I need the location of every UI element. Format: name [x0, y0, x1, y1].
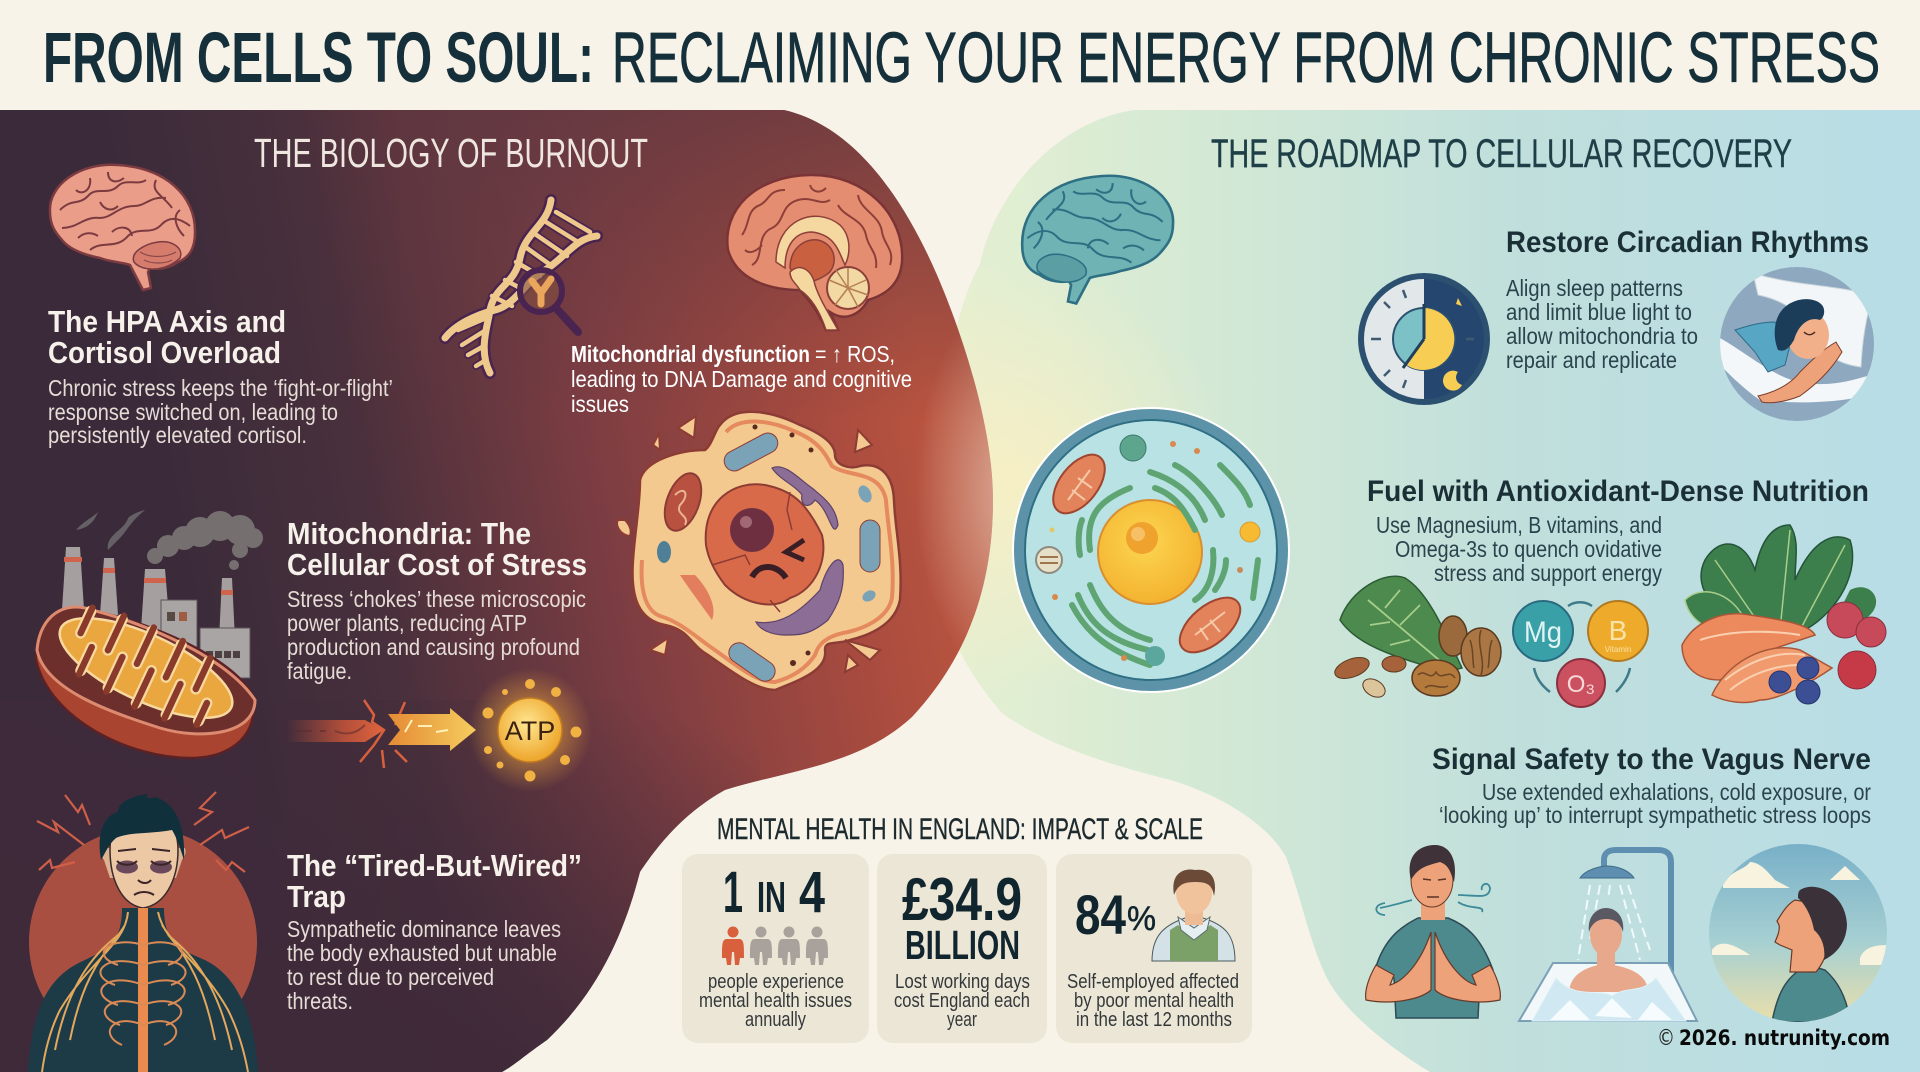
text: fuel with antioxidants: Use Magnesium, B vitamins, and: [1376, 512, 1662, 538]
text: mitochondria: power plants, reducing ATP: [287, 610, 527, 636]
icon: ATP sphere: [468, 668, 592, 792]
heading: the biology of burnout: THE BIOLOGY OF BURNOUT: [254, 130, 648, 176]
text: restore circadian rhythms: Align sleep patterns: [1506, 275, 1683, 301]
heading: mental health in england: MENTAL HEALTH IN ENGLAND: IMPACT & SCALE: [717, 813, 1203, 846]
text: restore circadian rhythms: [1506, 226, 1869, 373]
credit: copyright: 2026. nutrunity.com: [1679, 1026, 1890, 1050]
text: mitochondrial dysfunction: issues: [571, 391, 629, 417]
stat card: 84 percent: %: [1127, 900, 1156, 938]
stat card: 1 in 4: mental health issues: [699, 989, 852, 1012]
text: tired but wired: Trap: [287, 879, 346, 914]
text: signal safety to the vagus nerve: ‘looking up’ to interrupt sympathetic stress loops: [1439, 802, 1871, 828]
credit: copyright: ©: [1657, 1026, 1675, 1051]
icon: vitamin spheres: Mg: [1524, 616, 1562, 649]
text: restore circadian rhythms: Restore Circadian Rhythms: [1506, 226, 1869, 259]
icon: vitamin spheres: B: [1609, 615, 1627, 646]
text: mitochondria: fatigue.: [287, 658, 352, 684]
icon: vitamin spheres: Vitamin: [1605, 645, 1631, 654]
stat card: 1 in 4: [682, 854, 869, 1043]
stat card: 1 in 4: annually: [745, 1008, 807, 1031]
icon: salmon greens and berries: [1682, 525, 1886, 704]
arrow: broken energy flow to ATP: [286, 700, 476, 768]
title: FROM CELLS TO SOUL:: [43, 19, 594, 98]
text: HPA axis: Cortisol Overload: [48, 335, 281, 370]
icon: damaged cell: [617, 412, 901, 690]
icon: tired wired figure with nerves: [28, 792, 258, 1072]
text: tired but wired: Sympathetic dominance leaves: [287, 916, 561, 942]
stat card: 84 percent: Self-employed affected: [1067, 970, 1239, 993]
text: tired but wired: The “Tired-But-Wired”: [287, 848, 582, 883]
icon: pink brain: [50, 165, 195, 290]
stat card: 84 percent: by poor mental health: [1074, 989, 1234, 1012]
icon: teal brain: [1022, 176, 1173, 304]
stat card: 84 percent: [1056, 854, 1252, 1043]
stat card: 34.9 billion: BILLION: [905, 922, 1020, 968]
text: mitochondria: [287, 516, 587, 684]
stat card: 34.9 billion: £34.9: [902, 866, 1022, 933]
title: [43, 19, 1880, 98]
text: signal safety to the vagus nerve: [1432, 743, 1871, 828]
icon: sleeping woman: [1720, 267, 1880, 421]
stat card: 34.9 billion: Lost working days: [895, 970, 1030, 993]
icon: mitochondrion: [36, 592, 255, 758]
text: signal safety to the vagus nerve: Signal Safety to the Vagus Nerve: [1432, 743, 1871, 776]
text: mitochondria: Cellular Cost of Stress: [287, 547, 587, 582]
text: mitochondria: production and causing profound: [287, 634, 580, 660]
icon: leafy greens and nuts: [1332, 576, 1501, 701]
text: restore circadian rhythms: repair and replicate: [1506, 347, 1677, 373]
stat card: 34.9 billion: year: [947, 1008, 977, 1031]
panel: biology of burnout background: [0, 110, 1010, 1072]
text: fuel with antioxidants: Fuel with Antioxidant-Dense Nutrition: [1367, 475, 1869, 508]
stat card: 1 in 4: 4: [799, 860, 825, 925]
text: mitochondrial dysfunction: leading to DNA Damage and cognitive: [571, 366, 912, 392]
icon: breathing person: [1366, 845, 1500, 1018]
icon: ATP sphere: ATP: [505, 716, 555, 746]
text: tired but wired: [287, 848, 582, 1014]
text: tired but wired: to rest due to perceived: [287, 964, 494, 990]
text: mitochondrial dysfunction: = ↑ ROS,: [815, 341, 895, 367]
text: fuel with antioxidants: Omega-3s to quench ovidative: [1395, 536, 1662, 562]
icon: DNA helix with magnifier: [445, 200, 597, 373]
stat card: 84 percent: 84: [1075, 883, 1126, 946]
icon: sagittal brain: [727, 175, 902, 330]
text: HPA axis: persistently elevated cortisol.: [48, 422, 307, 448]
panel: roadmap to recovery background: [945, 110, 1920, 1072]
text: mitochondrial dysfunction: [571, 341, 912, 417]
stat card: 1 in 4: people experience: [708, 970, 844, 993]
icon: vitamin spheres: O₃: [1567, 671, 1595, 698]
icon: vitamin spheres: [1513, 601, 1648, 707]
stat card: 34.9 billion: cost England each: [894, 989, 1030, 1012]
text: HPA axis: [48, 304, 393, 448]
icon: day night clock: [1358, 273, 1490, 405]
icon: smoking factory: [62, 510, 263, 678]
text: restore circadian rhythms: allow mitochondria to: [1506, 323, 1698, 349]
stat card: 1 in 4: 1: [723, 860, 743, 925]
text: mitochondria: Mitochondria: The: [287, 516, 531, 551]
text: fuel with antioxidants: stress and support energy: [1434, 560, 1662, 586]
text: tired but wired: the body exhausted but unable: [287, 940, 557, 966]
text: HPA axis: The HPA Axis and: [48, 304, 286, 339]
stat card: 84 percent: in the last 12 months: [1076, 1008, 1232, 1031]
text: mitochondrial dysfunction: Mitochondrial dysfunction: [571, 341, 810, 367]
icon: cold shower in ice bath: [1519, 850, 1697, 1021]
text: tired but wired: threats.: [287, 988, 353, 1014]
stat card: 1 in 4: IN: [757, 873, 786, 922]
icon: healthy cell: [1013, 408, 1289, 692]
text: mitochondria: Stress ‘chokes’ these microscopic: [287, 586, 586, 612]
text: HPA axis: response switched on, leading to: [48, 399, 338, 425]
text: HPA axis: Chronic stress keeps the ‘fight-or-flight’: [48, 375, 393, 401]
stat card: 34.9 billion: [877, 854, 1047, 1043]
text: fuel with antioxidants: [1367, 475, 1869, 586]
icon: person looking up at sky: [1709, 844, 1890, 1024]
text: restore circadian rhythms: and limit blue light to: [1506, 299, 1692, 325]
